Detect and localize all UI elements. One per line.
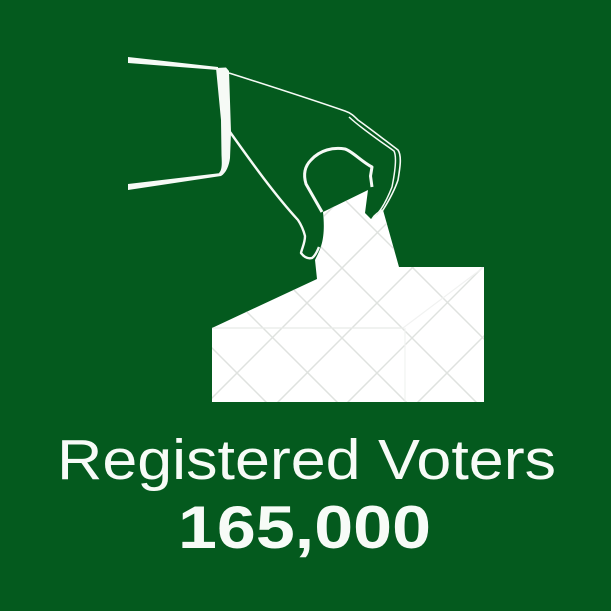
ballot box and paper: [212, 190, 484, 402]
infographic canvas: [62, 57, 554, 558]
sleeve top edge: [128, 57, 218, 70]
hand outline wrist to fingertip: [230, 132, 319, 258]
hand outline inner strand: [349, 117, 395, 213]
hand outline back: [229, 73, 400, 219]
cuff: [216, 68, 231, 176]
heading: Registered Voters: Registered Voters: [57, 428, 556, 492]
value: 165,000: 165,000: [178, 494, 431, 561]
icon: hand casting ballot: [128, 57, 484, 402]
finger and thumb loop: [305, 148, 372, 212]
sleeve bottom edge: [128, 173, 221, 190]
